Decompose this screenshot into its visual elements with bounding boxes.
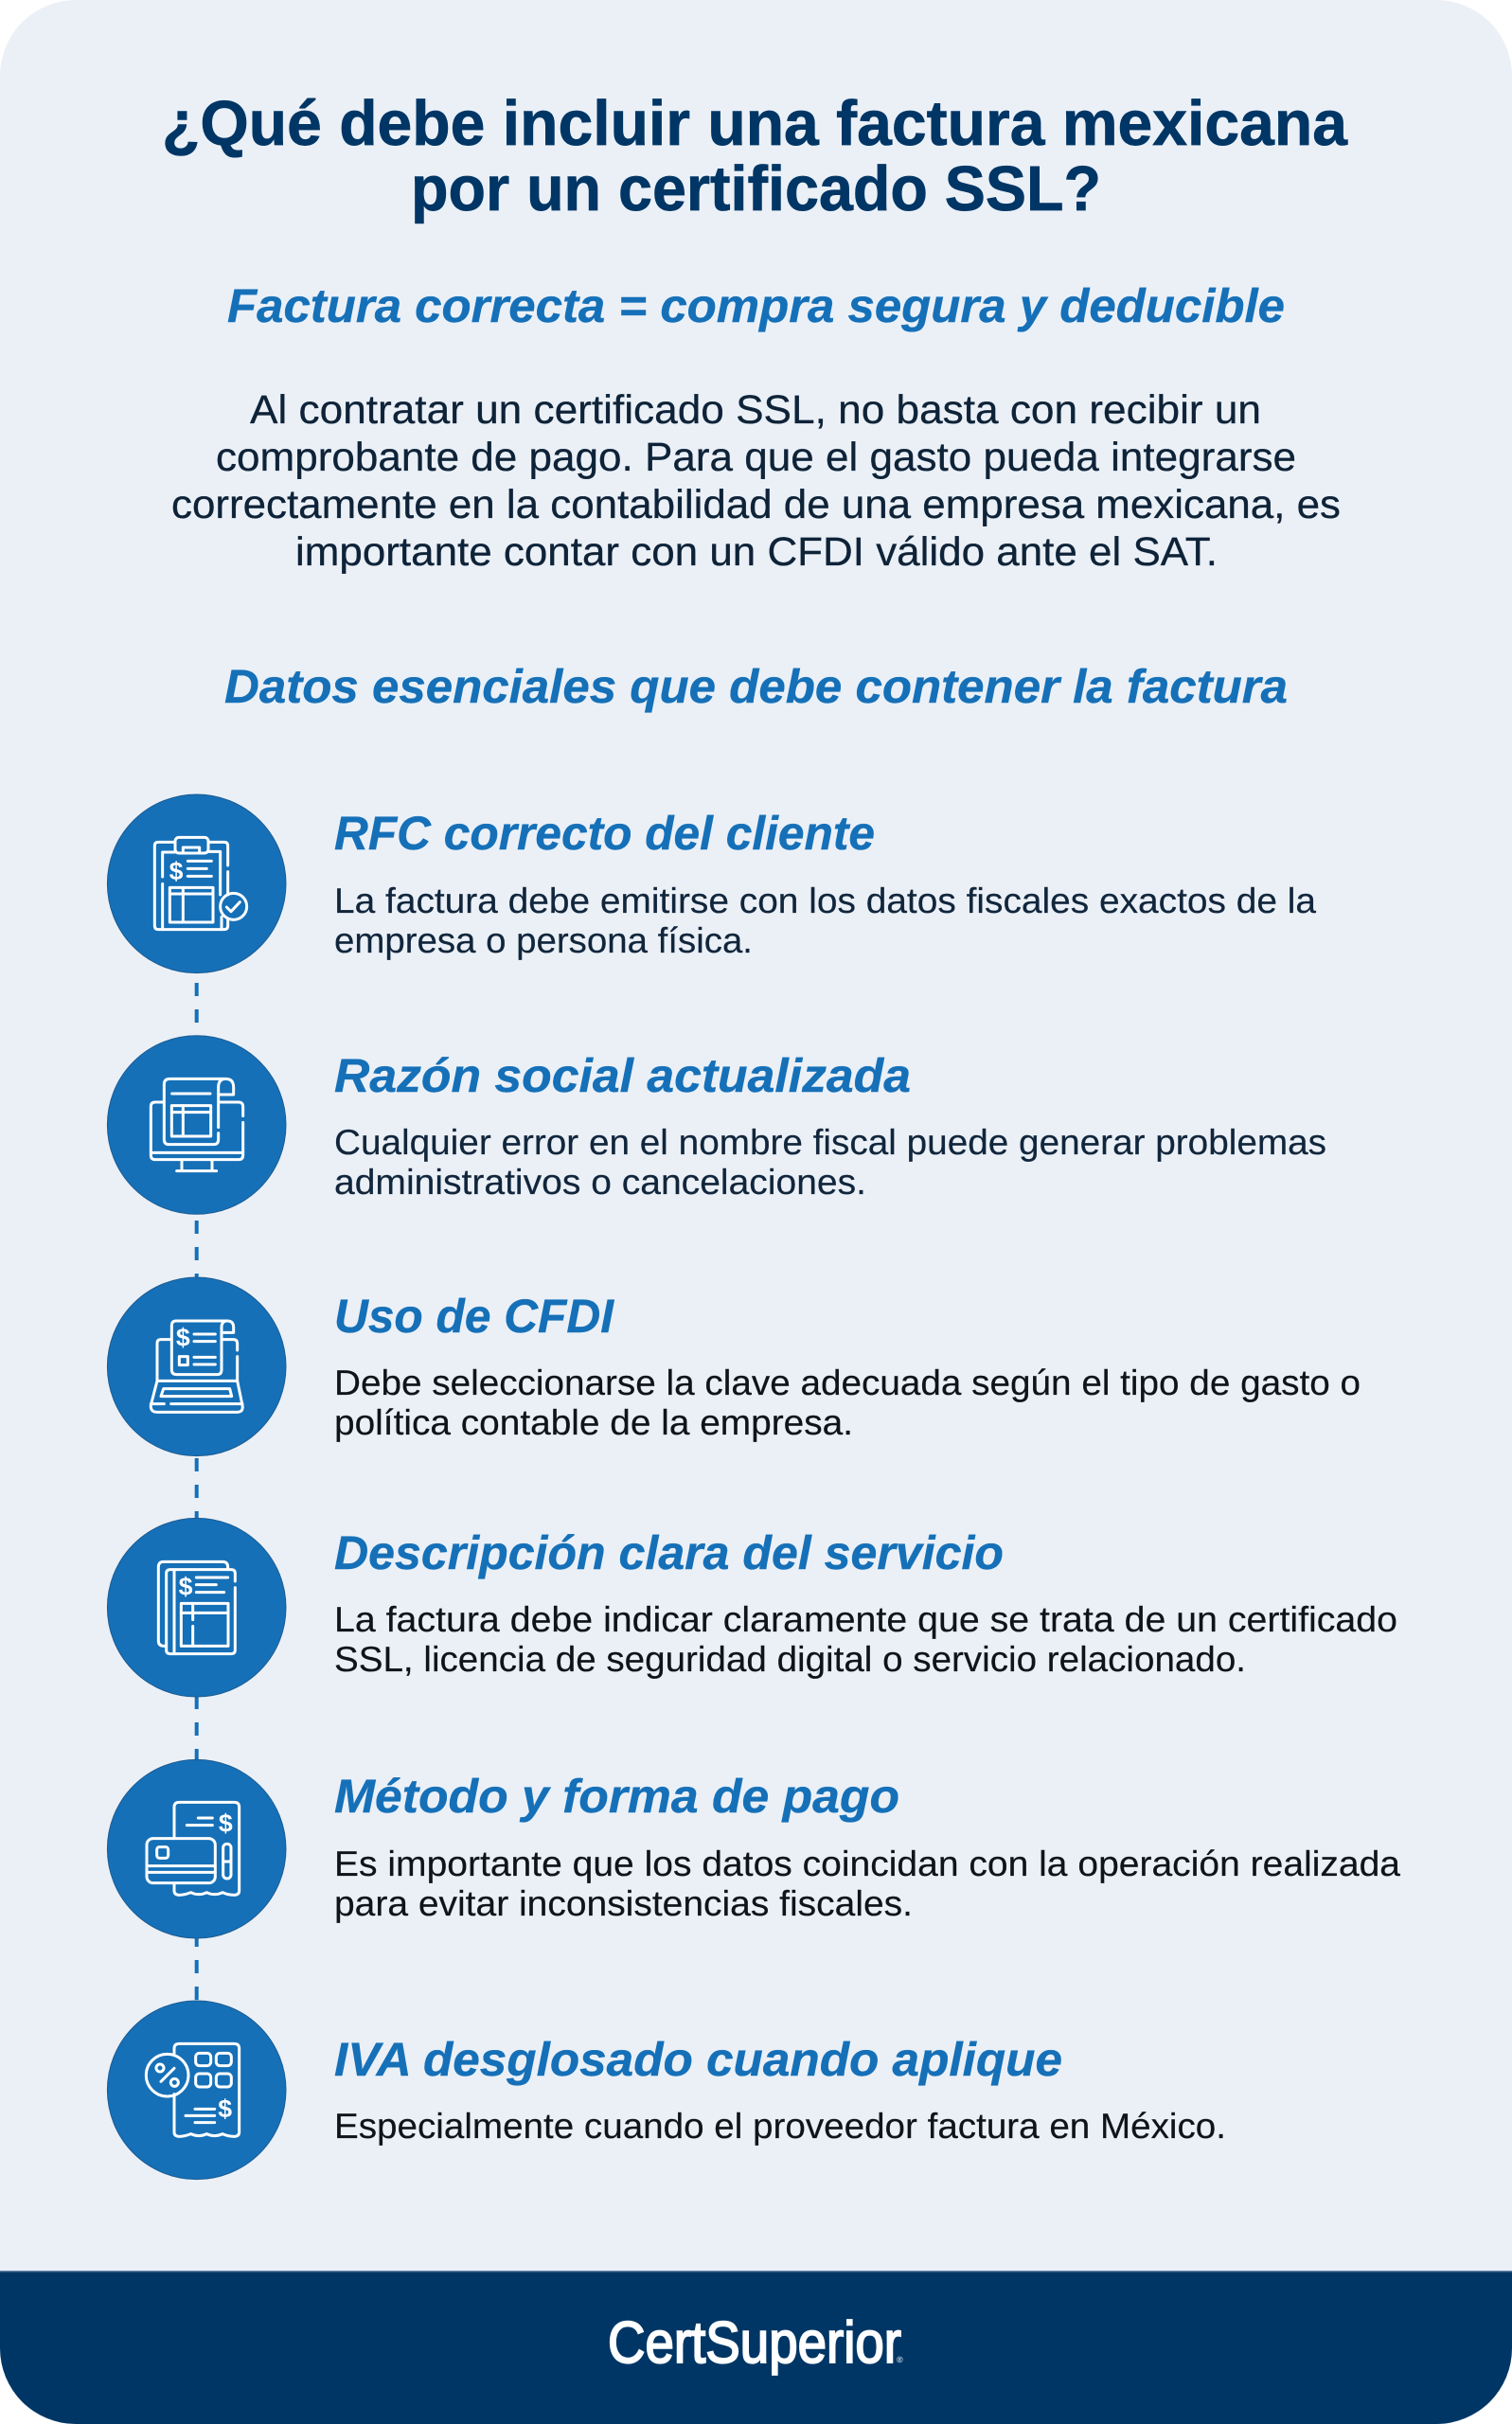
description: Debe seleccionarse la clave adecuada según el tipo de gasto o [334,1363,1361,1402]
description: política contable de la empresa. [334,1402,853,1442]
dashed connector [195,983,199,2001]
subtitle: Factura correcta = compra segura y deducible [227,279,1285,332]
heading: RFC correcto del cliente [334,807,875,860]
description [334,881,1316,960]
description: La factura debe indicar claramente que se trata de un certificado [334,1599,1397,1639]
icon: credit card and receipt [107,1759,286,1938]
description: La factura debe emitirse con los datos fiscales exactos de la [334,881,1316,920]
item: IVA desglosado cuando aplique [107,2001,1226,2180]
heading: Uso de CFDI [334,1290,614,1343]
icon: laptop with receipt [107,1277,286,1456]
description: empresa o persona física. [334,920,753,960]
item: Uso de CFDI [107,1277,1361,1456]
title: ¿Qué debe incluir una factura mexicana [162,88,1348,159]
description [334,1122,1326,1202]
icon: laptop with receipt: $ [176,1323,190,1351]
footer band [0,2271,1512,2424]
title [162,88,1348,224]
icon: percent and calculator receipt: $ [218,2094,232,2123]
icon: percent and calculator receipt [107,2001,286,2180]
section heading: Datos esenciales que debe contener la factura [224,660,1288,713]
description: SSL, licencia de seguridad digital o servicio relacionado. [334,1639,1246,1679]
description: para evitar inconsistencias fiscales. [334,1883,913,1923]
logo: CertSuperior: CertSuperior [608,2310,901,2376]
item: Método y forma de pago [107,1759,1400,1938]
intro paragraph: comprobante de pago. Para que el gasto pueda integrarse [216,436,1296,480]
heading: Razón social actualizada [334,1049,911,1102]
description: administrativos o cancelaciones. [334,1162,866,1202]
title: por un certificado SSL? [411,153,1101,224]
description: Cualquier error en el nombre fiscal puede generar problemas [334,1122,1326,1162]
icon: stacked documents: $ [179,1572,192,1600]
intro paragraph: importante contar con un CFDI válido ante el SAT. [295,530,1218,575]
item: RFC correcto del cliente [107,794,1316,973]
icon: monitor with document [107,1036,286,1214]
description: Especialmente cuando el proveedor factura en México. [334,2106,1226,2146]
heading: Método y forma de pago [334,1770,899,1823]
intro paragraph [171,388,1341,575]
logo: CertSuperior: ® [897,2355,903,2364]
icon: stacked documents [107,1518,286,1697]
description [334,1363,1361,1442]
icon: clipboard with check: $ [169,857,183,885]
description: Es importante que los datos coincidan con la operación realizada [334,1844,1400,1883]
icon: credit card and receipt: $ [219,1809,233,1837]
heading: Descripción clara del servicio [334,1526,1004,1579]
description [334,1844,1400,1923]
intro paragraph: Al contratar un certificado SSL, no basta con recibir un [250,388,1261,433]
heading: IVA desglosado cuando aplique [334,2033,1062,2086]
item: Descripción clara del servicio [107,1518,1397,1697]
intro paragraph: correctamente en la contabilidad de una empresa mexicana, es [171,483,1341,527]
description [334,1599,1397,1679]
icon: clipboard with check [107,794,286,973]
item: Razón social actualizada [107,1036,1326,1214]
